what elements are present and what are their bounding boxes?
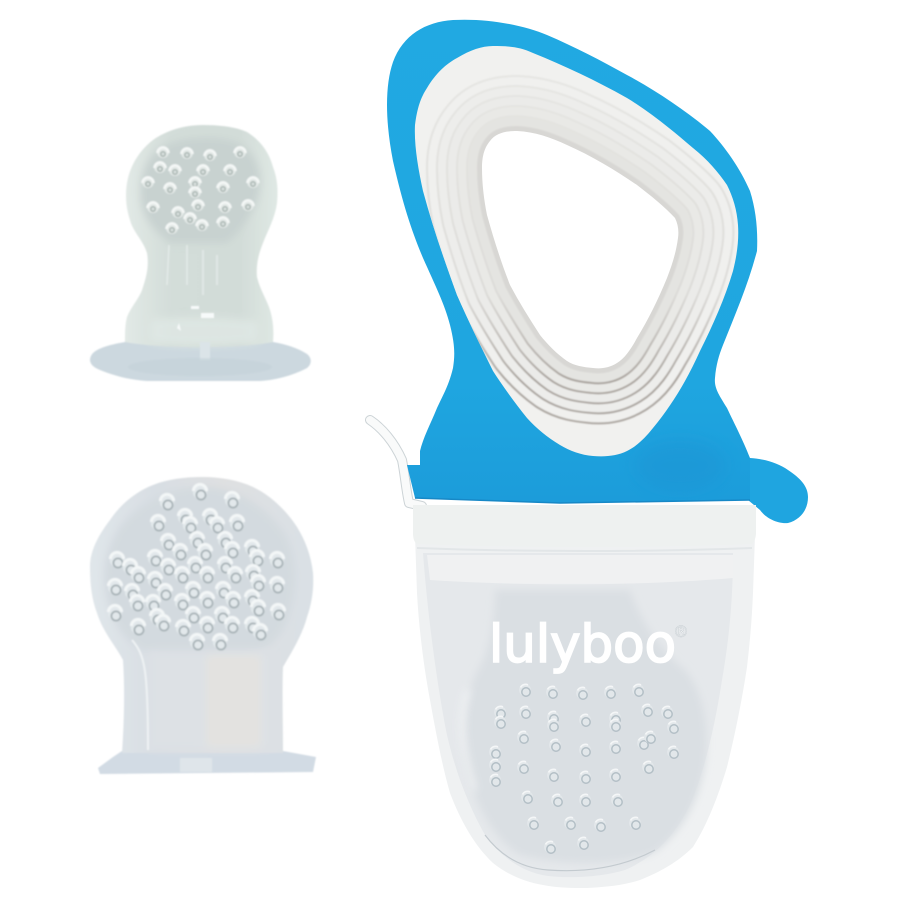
large nipple flange notch	[180, 758, 212, 772]
small nipple streaks	[167, 245, 217, 295]
ring ridges	[482, 131, 678, 368]
small nipple dots	[142, 146, 259, 234]
large nipple neck inner	[148, 650, 270, 750]
registered mark: ®	[673, 622, 689, 641]
latch clip	[370, 420, 422, 506]
blue side tab	[748, 458, 808, 523]
large nipple centre lighter panel	[206, 655, 261, 747]
handle darker patch	[635, 440, 725, 490]
mesh basket	[415, 535, 755, 888]
large nipple flange	[98, 751, 316, 774]
large nipple dots	[108, 484, 285, 650]
small nipple flange	[90, 342, 311, 381]
basket collar	[413, 505, 756, 547]
brand wordmark: lulyboo	[489, 615, 676, 675]
basket dots	[489, 684, 679, 853]
blue handle	[387, 20, 757, 503]
feeder	[370, 20, 808, 888]
basket light reflection	[462, 690, 475, 790]
handle base edge	[415, 498, 750, 503]
small silicone nipple	[90, 125, 311, 381]
large silicone nipple	[90, 477, 316, 774]
basket bottom rim shadow	[485, 835, 655, 871]
inner nipple silhouette	[464, 590, 706, 863]
collar lip line	[417, 548, 752, 551]
infographic: product photo of feeder and two silicone nipples	[90, 20, 808, 888]
ring hole	[482, 131, 678, 368]
small nipple body	[125, 125, 278, 347]
large nipple ridge line	[132, 640, 148, 750]
basket upper strip	[427, 555, 733, 584]
white grip ring	[415, 46, 738, 456]
large nipple body	[90, 477, 313, 753]
small nipple base window	[150, 317, 258, 346]
small nipple bulb interior	[141, 138, 260, 243]
small nipple flange hollow	[128, 358, 272, 376]
large nipple bulb interior	[104, 487, 295, 660]
small nipple highlights	[177, 306, 214, 360]
basket inner wall	[423, 553, 733, 877]
